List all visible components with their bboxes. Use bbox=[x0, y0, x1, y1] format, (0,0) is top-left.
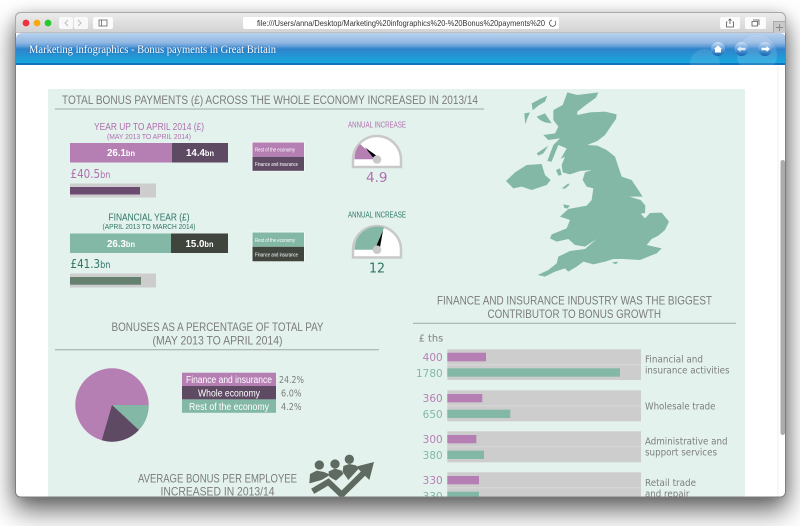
address bar: file:///Users/anna/Desktop/Marketing%20infographics%20-%20Bonus%20payments%20 bbox=[257, 19, 546, 28]
panel: financial year: (APRIL 2013 TO MARCH 2014) bbox=[102, 222, 196, 231]
heading: bonuses as a percentage: (MAY 2013 TO APRIL 2014) bbox=[152, 334, 283, 348]
row: wholesale trade: 360 bbox=[423, 393, 443, 405]
heading: finance and insurance industry bbox=[413, 294, 736, 323]
pie legend table: Whole economy bbox=[198, 388, 260, 400]
row: wholesale trade: 650 bbox=[423, 409, 443, 421]
row: retail trade and repair: Retail trade bbox=[645, 478, 696, 489]
header title: Marketing infographics - Bonus payments in Great Britain bbox=[29, 44, 276, 56]
row: administrative and support services bbox=[423, 431, 728, 462]
icon: home button bbox=[711, 42, 725, 56]
pie legend table: Rest of the economy bbox=[189, 402, 269, 413]
scrollbar bbox=[778, 66, 785, 497]
pie legend table: 6.0% bbox=[281, 388, 302, 400]
pie chart bbox=[75, 368, 149, 442]
total value: £40.5bn bbox=[70, 167, 110, 181]
legend: financial year bbox=[252, 232, 305, 262]
gauge: annual increase 4.9 bbox=[348, 120, 406, 186]
row: wholesale trade: Wholesale trade bbox=[645, 402, 716, 412]
app header bar bbox=[16, 33, 785, 65]
navigation buttons bbox=[59, 17, 113, 29]
row: financial and insurance activities bbox=[416, 349, 730, 380]
legend: year bbox=[252, 142, 305, 172]
heading: finance and insurance industry: FINANCE AND INSURANCE INDUSTRY WAS THE BIGGEST bbox=[437, 294, 713, 308]
stacked bar bbox=[70, 234, 228, 253]
icon: people and rising arrow bbox=[309, 455, 374, 495]
map: Great Britain and Northern Ireland bbox=[506, 92, 669, 277]
icon: forward button bbox=[758, 42, 772, 56]
legend: financial year: Rest of the economy bbox=[255, 238, 295, 244]
icon: back button bbox=[734, 42, 748, 56]
row: financial and insurance activities: 1780 bbox=[416, 368, 443, 380]
progress bar bbox=[70, 274, 156, 288]
gauge: annual increase 12 bbox=[348, 210, 406, 276]
heading: average bonus per employee: INCREASED IN 2013/14 bbox=[160, 484, 275, 498]
gauge: annual increase 12: ANNUAL INCREASE bbox=[348, 210, 406, 220]
row: administrative and support services: 380 bbox=[423, 450, 443, 462]
stacked bar: 26.1bn bbox=[107, 147, 135, 159]
heading: average bonus per employee bbox=[138, 474, 297, 496]
row: wholesale trade bbox=[423, 390, 716, 421]
heading: total bonus payments: TOTAL BONUS PAYMENTS (£) ACROSS THE WHOLE ECONOMY INCREASED IN 2013/14 bbox=[62, 93, 478, 107]
row: retail trade and repair bbox=[423, 472, 696, 496]
row: retail trade and repair: 330 bbox=[423, 491, 443, 503]
pie legend table: Finance and insurance bbox=[186, 375, 272, 386]
pie legend table: 24.2% bbox=[279, 375, 304, 386]
row: retail trade and repair: and repair bbox=[645, 489, 690, 500]
panel: year up to April 2014: (MAY 2013 TO APRIL 2014) bbox=[107, 132, 191, 141]
pie legend table bbox=[182, 373, 304, 413]
stacked bar bbox=[70, 143, 228, 162]
heading: average bonus per employee: AVERAGE BONUS PER EMPLOYEE bbox=[138, 472, 297, 486]
gauge: annual increase 12: 12 bbox=[369, 262, 385, 276]
panel: year up to April 2014 bbox=[70, 122, 228, 198]
axis unit: £ ths bbox=[419, 334, 443, 345]
legend: financial year: Finance and insurance bbox=[255, 252, 298, 258]
legend: year: Rest of the economy bbox=[255, 148, 295, 154]
gauge: annual increase 4.9: 4.9 bbox=[366, 171, 388, 186]
row: administrative and support services: support services bbox=[645, 448, 717, 458]
stacked bar: 26.3bn bbox=[107, 238, 135, 250]
panel: financial year bbox=[70, 212, 228, 288]
stacked bar: 14.4bn bbox=[186, 147, 214, 159]
pie legend table: 4.2% bbox=[281, 402, 302, 413]
row: financial and insurance activities: Financial and bbox=[645, 355, 703, 366]
legend: year: Finance and insurance bbox=[255, 162, 298, 168]
total value: £41.3bn bbox=[70, 257, 110, 271]
infographic panel bbox=[48, 89, 745, 498]
row: retail trade and repair: 330 bbox=[423, 475, 443, 487]
row: administrative and support services: Administrative and bbox=[645, 437, 728, 448]
bar chart: bonus growth by industry bbox=[416, 334, 730, 503]
stacked bar: 15.0bn bbox=[186, 238, 214, 250]
row: financial and insurance activities: 400 bbox=[423, 352, 443, 364]
financial year title: FINANCIAL YEAR (£) bbox=[108, 212, 190, 224]
heading: bonuses as a percentage: BONUSES AS A PERCENTAGE OF TOTAL PAY bbox=[112, 320, 324, 334]
gauge: annual increase 4.9: ANNUAL INCREASE bbox=[348, 120, 406, 130]
row: financial and insurance activities: insurance activities bbox=[645, 366, 730, 376]
toolbar buttons bbox=[720, 17, 786, 34]
progress bar bbox=[70, 184, 156, 198]
heading: finance and insurance industry: CONTRIBUTOR TO BONUS GROWTH bbox=[488, 307, 661, 321]
row: administrative and support services: 300 bbox=[423, 434, 443, 446]
window controls bbox=[23, 20, 51, 26]
year title: YEAR UP TO APRIL 2014 (£) bbox=[94, 122, 204, 133]
heading: bonuses as a percentage bbox=[55, 320, 379, 350]
address bar bbox=[243, 17, 559, 29]
browser toolbar bbox=[16, 12, 786, 34]
